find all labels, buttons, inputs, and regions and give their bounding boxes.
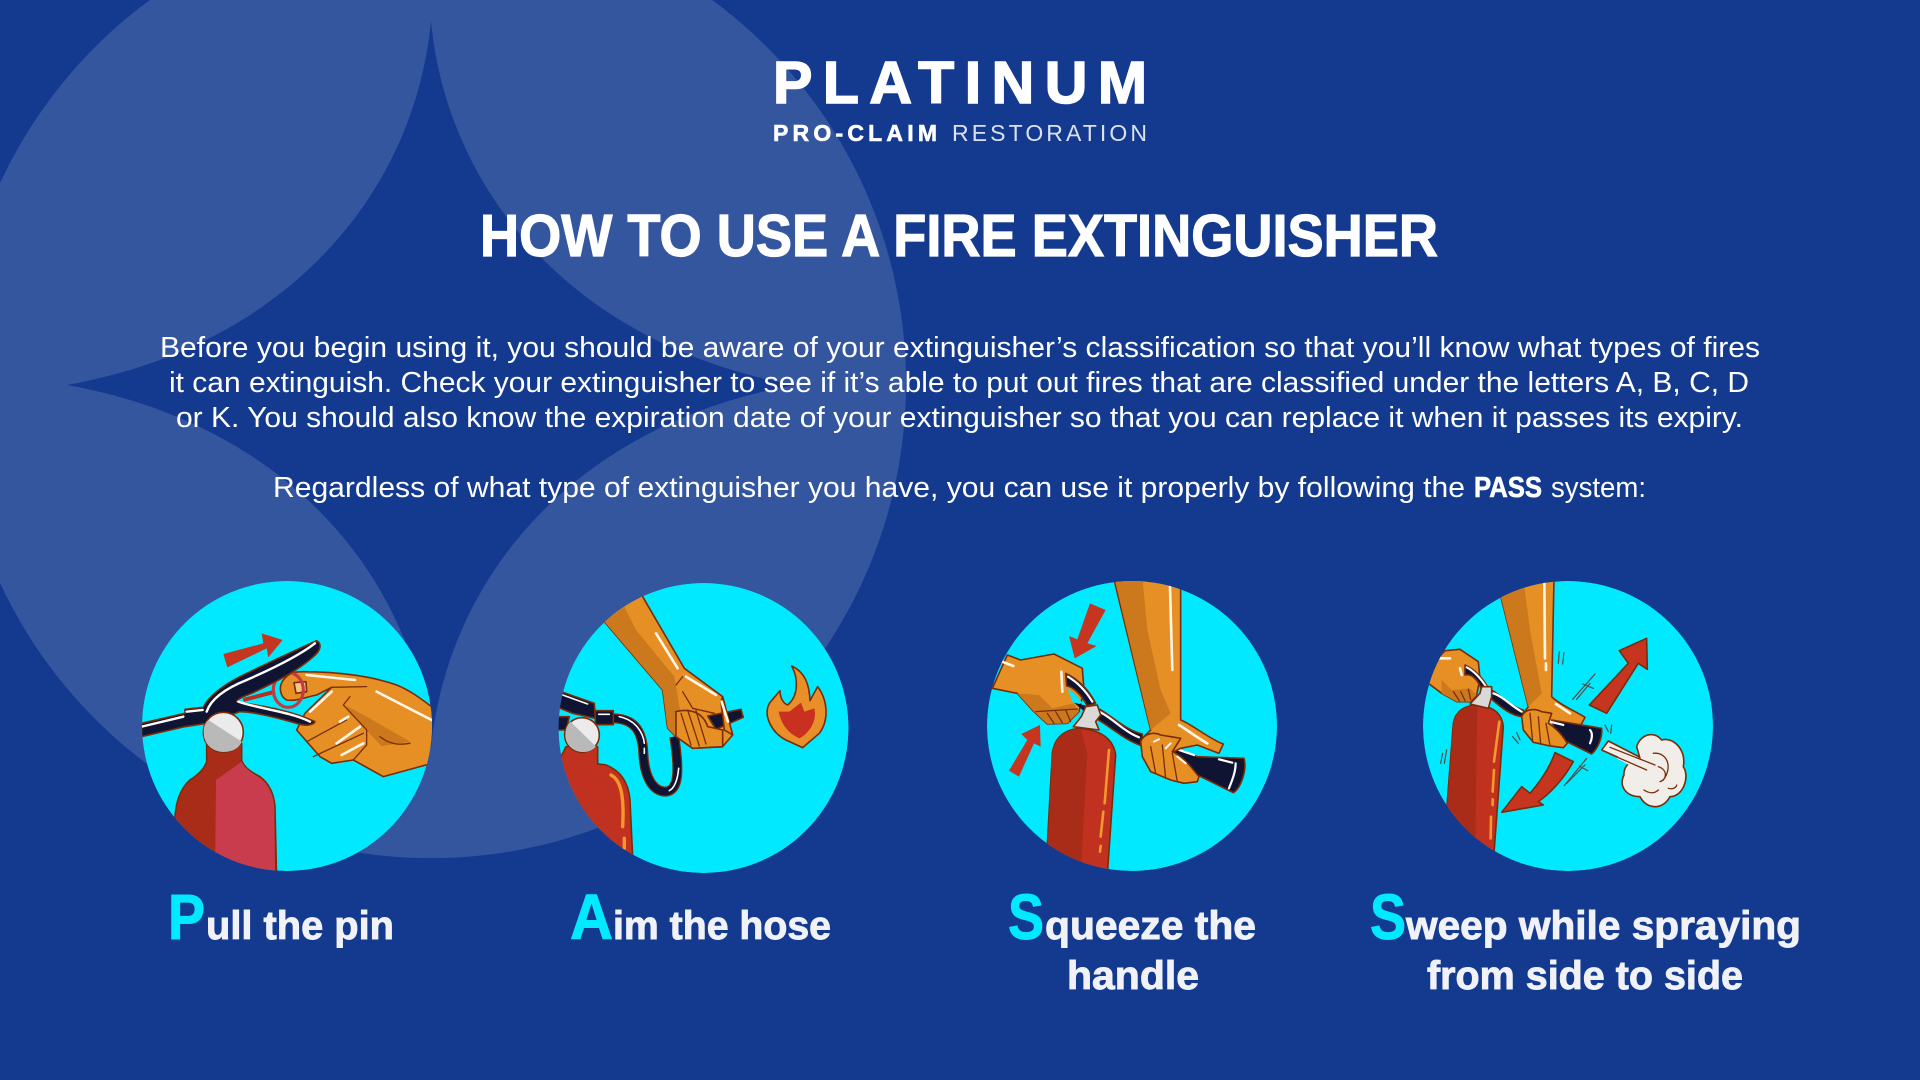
label: aim the hose: im the hose bbox=[613, 904, 831, 948]
label: sweep while spraying: weep while spraying bbox=[1405, 904, 1801, 948]
step 1 illustration: pull the pin bbox=[142, 581, 438, 880]
arm bbox=[1113, 577, 1223, 753]
direction arrow bbox=[223, 633, 283, 667]
PASS intro line: system: bbox=[1551, 472, 1646, 504]
label: pull the pin: P bbox=[168, 881, 205, 953]
valve collar bbox=[1470, 687, 1492, 708]
down arrow bbox=[1502, 753, 1573, 812]
up arrow bbox=[1589, 638, 1647, 713]
forearm bbox=[1500, 578, 1585, 727]
step 2 illustration: aim the hose bbox=[556, 580, 848, 873]
grip fingers bbox=[1141, 733, 1199, 783]
extinguisher body bbox=[175, 743, 277, 880]
extinguisher body bbox=[556, 747, 633, 857]
intro paragraph: Before you begin using it, you should be aware of your extinguisher’s classification so that you’ll know what types of fires bbox=[160, 332, 1760, 364]
step 3 illustration: squeeze the handle bbox=[987, 577, 1277, 875]
intro paragraph: or K. You should also know the expiration date of your extinguisher so that you can replace it when it passes its expiry. bbox=[176, 402, 1743, 434]
label: sweep while spraying: from side to side bbox=[1427, 954, 1743, 998]
extinguisher body bbox=[1046, 728, 1116, 875]
extinguisher valve bbox=[556, 690, 595, 718]
label: aim the hose: A bbox=[570, 881, 613, 953]
left hand bbox=[1428, 649, 1480, 702]
squeeze arrows bbox=[1069, 603, 1106, 658]
intro paragraph: it can extinguish. Check your extinguisher to see if it’s able to put out fires that are classified under the letters A, B, C, D bbox=[169, 367, 1749, 399]
logo subline bold: PRO-CLAIM bbox=[773, 120, 937, 146]
label: aim the hose bbox=[570, 881, 831, 953]
PASS intro line: Regardless of what type of extinguisher you have, you can use it properly by following the bbox=[273, 472, 1465, 504]
spray jet bbox=[1600, 740, 1639, 758]
extinguisher body bbox=[1443, 705, 1503, 853]
lever bbox=[1465, 665, 1488, 690]
nozzle bbox=[708, 709, 743, 729]
valve cap bbox=[203, 712, 243, 752]
title: HOW TO USE A FIRE EXTINGUISHER bbox=[480, 203, 1438, 269]
label: squeeze the handle bbox=[1008, 881, 1256, 998]
label: squeeze the handle: queeze the bbox=[1045, 904, 1256, 948]
PASS intro line: PASS bbox=[1474, 472, 1542, 504]
valve cap bbox=[565, 718, 599, 752]
spray cloud bbox=[1622, 735, 1686, 807]
finger nail bbox=[294, 682, 307, 693]
left hand bbox=[992, 654, 1084, 724]
hose bbox=[613, 718, 677, 792]
step 4 illustration: sweep while spraying bbox=[1423, 578, 1713, 871]
background logo mark bbox=[0, 0, 906, 858]
flame icon bbox=[767, 666, 826, 748]
valve collar bbox=[1073, 705, 1101, 730]
extinguisher handle bbox=[142, 641, 320, 737]
handle bbox=[1096, 708, 1142, 746]
label: squeeze the handle: S bbox=[1008, 881, 1044, 953]
logo bbox=[773, 50, 1147, 146]
hand pulling pin bbox=[280, 672, 438, 777]
label: pull the pin: ull the pin bbox=[206, 904, 394, 948]
nozzle bbox=[1552, 720, 1602, 754]
nozzle bbox=[1172, 748, 1245, 793]
logo wordmark: PLATINUM bbox=[773, 50, 1147, 116]
logo subline light: RESTORATION bbox=[952, 120, 1147, 146]
lever bbox=[1067, 688, 1083, 703]
label: sweep while spraying bbox=[1370, 881, 1801, 998]
motion ticks bbox=[1441, 652, 1612, 786]
pin rod bbox=[243, 692, 275, 700]
label: sweep while spraying: S bbox=[1370, 881, 1406, 953]
grip fingers bbox=[1522, 710, 1567, 748]
label: squeeze the handle: handle bbox=[1067, 954, 1199, 998]
handle bbox=[1492, 690, 1524, 718]
label: pull the pin bbox=[168, 881, 394, 953]
intro paragraph bbox=[160, 332, 1760, 434]
pin ring bbox=[273, 673, 303, 707]
arm and hand bbox=[604, 596, 734, 750]
